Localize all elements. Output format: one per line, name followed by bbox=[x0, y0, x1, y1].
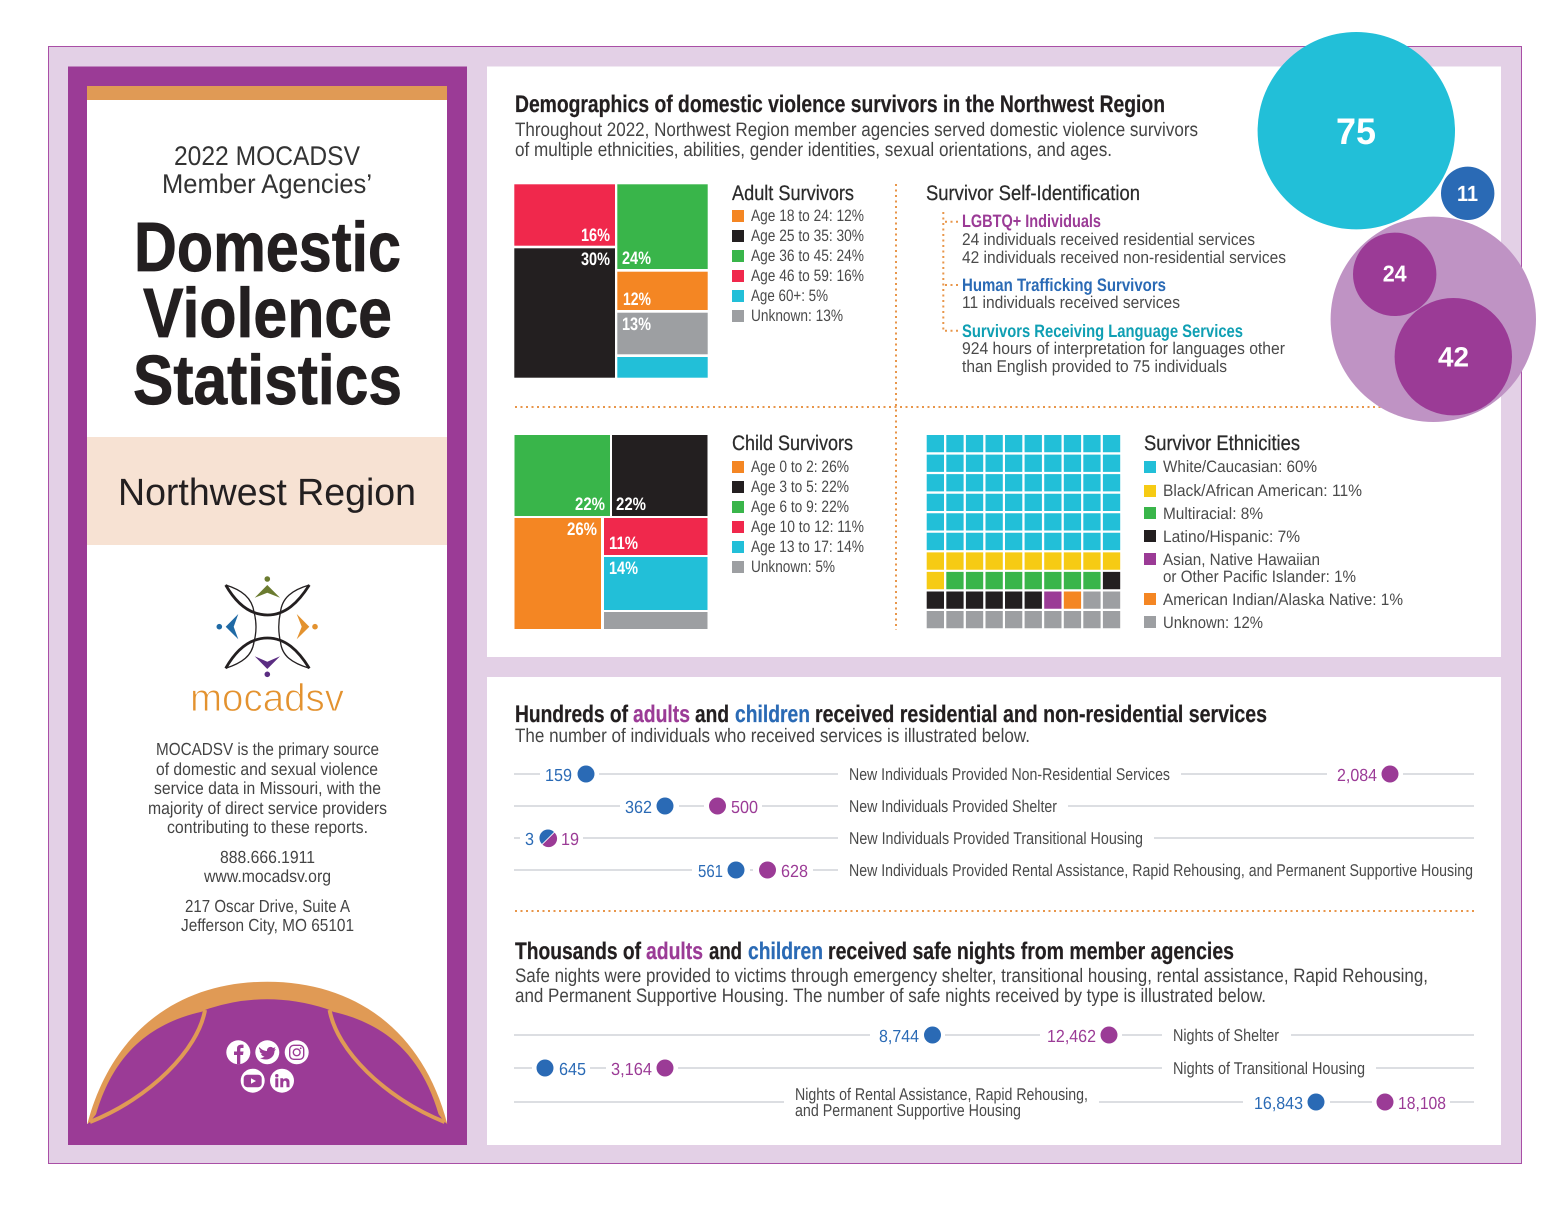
panel: demographics bbox=[487, 66, 1501, 657]
chart: child survivors treemap: 22% bbox=[575, 494, 605, 514]
LGBTQ+ individuals: LGBTQ+ Individuals bbox=[962, 211, 1101, 231]
legend: survivor ethnicities: Asian, Native Hawaiian bbox=[1163, 551, 1320, 569]
dot plot: shelter: 362 bbox=[625, 797, 652, 817]
dot plot: non-residential services: 2,084 bbox=[1337, 765, 1377, 785]
dot plot: non-residential services: New Individuals Provided Non-Residential Services bbox=[849, 765, 1170, 784]
survivors receiving language services: than English provided to 75 individuals bbox=[962, 357, 1227, 376]
dot plot: nights of rental assistance bbox=[514, 1085, 1474, 1120]
dot plot: nights of shelter: 12,462 bbox=[1047, 1026, 1096, 1046]
human trafficking survivors: 11 individuals received services bbox=[962, 293, 1180, 312]
services heading: adults bbox=[633, 701, 690, 728]
safe nights subheading: and Permanent Supportive Housing. The number of safe nights received by type is illustrated below. bbox=[515, 985, 1266, 1007]
decorative dome bbox=[87, 982, 447, 1124]
services subheading: The number of individuals who received services is illustrated below. bbox=[515, 725, 1030, 747]
dot plot: rental assistance: 561 bbox=[698, 861, 723, 881]
dot plot: nights of transitional housing: 3,164 bbox=[611, 1059, 652, 1079]
legend: survivor ethnicities: American Indian/Alaska Native: 1% bbox=[1163, 591, 1403, 609]
dot plot: non-residential services: 159 bbox=[545, 765, 572, 785]
legend: adult survivors bbox=[732, 182, 864, 325]
icon: facebook bbox=[226, 1040, 250, 1064]
safe nights heading: adults bbox=[646, 938, 703, 965]
human trafficking survivors: Human Trafficking Survivors bbox=[962, 275, 1166, 295]
logo wordmark: mocadsv bbox=[190, 677, 344, 720]
demographics intro bbox=[515, 119, 1198, 161]
contact details: www.mocadsv.org bbox=[203, 866, 331, 886]
dot plot: nights of rental assistance: 18,108 bbox=[1398, 1093, 1446, 1113]
about text: MOCADSV is the primary source bbox=[156, 739, 379, 759]
safe nights subheading: Safe nights were provided to victims through emergency shelter, transitional housing, rental assistance, Rapid Rehousing, bbox=[515, 965, 1428, 987]
dot plot: non-residential services bbox=[514, 765, 1474, 785]
chart: ethnicity waffle bbox=[927, 435, 1120, 628]
bubble: 75: 75 bbox=[1336, 111, 1376, 152]
survivor self-identification: Survivor Self-Identification bbox=[926, 182, 1140, 205]
legend: adult survivors: Age 46 to 59: 16% bbox=[751, 267, 864, 285]
legend: child survivors: Age 6 to 9: 22% bbox=[751, 498, 849, 516]
legend: adult survivors: Age 25 to 35: 30% bbox=[751, 227, 864, 245]
legend: child survivors: Child Survivors bbox=[732, 432, 853, 455]
icon: instagram bbox=[285, 1040, 309, 1064]
legend: survivor ethnicities: Latino/Hispanic: 7% bbox=[1163, 528, 1300, 546]
chart: child survivors treemap: 14% bbox=[609, 558, 638, 578]
chart: adult survivors treemap: 13% bbox=[622, 314, 651, 334]
legend: adult survivors: Age 36 to 45: 24% bbox=[751, 247, 864, 265]
bubble: 11 bbox=[1441, 167, 1494, 220]
dot plot: nights of shelter: Nights of Shelter bbox=[1173, 1026, 1279, 1045]
LGBTQ+ individuals: 42 individuals received non-residential services bbox=[962, 248, 1286, 267]
survivor self-identification bbox=[926, 182, 1286, 376]
dot plot: transitional housing: 3 bbox=[525, 829, 534, 849]
safe nights heading: children bbox=[748, 938, 823, 965]
sidebar kicker: 2022 MOCADSV bbox=[174, 141, 360, 171]
panel: services and safe nights bbox=[487, 677, 1501, 1145]
safe nights heading: and bbox=[709, 938, 742, 965]
chart: self-identification bubbles bbox=[1258, 32, 1536, 422]
legend: survivor ethnicities: Multiracial: 8% bbox=[1163, 505, 1263, 523]
about text: of domestic and sexual violence bbox=[156, 759, 378, 779]
bubble: 75 bbox=[1258, 32, 1455, 229]
title bbox=[133, 208, 402, 419]
services heading: Hundreds of bbox=[515, 701, 629, 728]
services heading: received residential and non-residential services bbox=[815, 701, 1267, 728]
bubble: 24: 24 bbox=[1383, 261, 1407, 287]
legend: survivor ethnicities bbox=[1144, 432, 1403, 632]
contact details: 888.666.1911 bbox=[220, 847, 315, 867]
bubble: 11: 11 bbox=[1457, 181, 1478, 206]
safe nights subheading bbox=[515, 965, 1428, 1007]
dot plot: nights of transitional housing: Nights of Transitional Housing bbox=[1173, 1059, 1365, 1078]
title: Domestic bbox=[134, 208, 401, 286]
legend: survivor ethnicities: Unknown: 12% bbox=[1163, 614, 1263, 632]
sidebar kicker bbox=[162, 141, 372, 199]
address: Jefferson City, MO 65101 bbox=[181, 915, 354, 935]
region banner bbox=[87, 437, 447, 545]
chart: adult survivors treemap: 30% bbox=[581, 249, 610, 269]
icon: youtube bbox=[241, 1069, 265, 1093]
address bbox=[181, 896, 354, 935]
services heading: children bbox=[735, 701, 810, 728]
dot plot: nights of rental assistance: 16,843 bbox=[1254, 1093, 1303, 1113]
about text: service data in Missouri, with the bbox=[154, 778, 381, 798]
dot plot: rental assistance bbox=[514, 861, 1473, 881]
safe nights heading: Thousands of bbox=[515, 938, 642, 965]
dot plot: transitional housing bbox=[514, 829, 1474, 849]
safe nights heading: received safe nights from member agencies bbox=[828, 938, 1234, 965]
chart: adult survivors treemap bbox=[514, 184, 708, 378]
legend: adult survivors: Adult Survivors bbox=[732, 182, 854, 205]
about text bbox=[148, 739, 387, 837]
about text: contributing to these reports. bbox=[167, 817, 368, 837]
dot plot: nights of shelter bbox=[514, 1026, 1474, 1046]
legend: survivor ethnicities: Survivor Ethnicities bbox=[1144, 432, 1300, 455]
region banner: Northwest Region bbox=[118, 472, 416, 514]
legend: survivor ethnicities: or Other Pacific Islander: 1% bbox=[1163, 568, 1356, 586]
legend: child survivors: Age 3 to 5: 22% bbox=[751, 478, 849, 496]
dot plot: shelter: New Individuals Provided Shelter bbox=[849, 797, 1057, 816]
demographics heading: Demographics of domestic violence survivors in the Northwest Region bbox=[515, 91, 1165, 118]
chart: child survivors treemap: 11% bbox=[609, 533, 638, 553]
title: Statistics bbox=[133, 341, 402, 419]
icon: linkedin bbox=[270, 1069, 294, 1093]
dot plot: nights of rental assistance: Nights of Rental Assistance, Rapid Rehousing, bbox=[795, 1085, 1088, 1104]
contact details bbox=[203, 847, 331, 886]
dot plot: nights of shelter: 8,744 bbox=[879, 1026, 919, 1046]
bubble: 24 bbox=[1353, 233, 1436, 316]
chart: adult survivors treemap: 24% bbox=[622, 248, 651, 268]
services heading bbox=[515, 701, 1267, 728]
dot plot: rental assistance: 628 bbox=[781, 861, 808, 881]
dot plot: nights of transitional housing: 645 bbox=[559, 1059, 586, 1079]
bubble: LGBTQ+ total bbox=[1331, 217, 1536, 422]
dot plot: shelter bbox=[514, 797, 1474, 817]
dot plot: transitional housing: 19 bbox=[561, 829, 579, 849]
legend: survivor ethnicities: White/Caucasian: 60% bbox=[1163, 458, 1317, 476]
icon: twitter bbox=[255, 1040, 279, 1064]
address: 217 Oscar Drive, Suite A bbox=[185, 896, 350, 916]
dot plot: nights of transitional housing bbox=[514, 1059, 1474, 1079]
legend: child survivors: Age 13 to 17: 14% bbox=[751, 538, 864, 556]
legend: adult survivors: Age 60+: 5% bbox=[751, 287, 828, 305]
demographics intro: of multiple ethnicities, abilities, gender identities, sexual orientations, and ages. bbox=[515, 139, 1112, 161]
safe nights heading bbox=[515, 938, 1234, 965]
sidebar top accent bbox=[87, 86, 447, 100]
bubble: 42: 42 bbox=[1438, 342, 1469, 373]
chart: adult survivors treemap: 16% bbox=[581, 225, 610, 245]
LGBTQ+ individuals: 24 individuals received residential services bbox=[962, 230, 1255, 249]
chart: child survivors treemap bbox=[514, 435, 708, 629]
chart: child survivors treemap: 22% bbox=[616, 494, 646, 514]
survivors receiving language services: 924 hours of interpretation for languages other bbox=[962, 339, 1285, 358]
demographics intro: Throughout 2022, Northwest Region member agencies served domestic violence survivors bbox=[515, 119, 1198, 141]
legend: adult survivors: Unknown: 13% bbox=[751, 307, 843, 325]
dot plot: shelter: 500 bbox=[731, 797, 758, 817]
sidebar kicker: Member Agencies’ bbox=[162, 169, 372, 199]
icon: mocadsv logo bbox=[216, 576, 318, 677]
legend: child survivors: Age 0 to 2: 26% bbox=[751, 458, 849, 476]
dot plot: transitional housing: New Individuals Provided Transitional Housing bbox=[849, 829, 1143, 848]
chart: child survivors treemap: 26% bbox=[567, 519, 597, 539]
LGBTQ+ individuals bbox=[962, 211, 1286, 267]
legend: child survivors bbox=[732, 432, 864, 576]
survivors receiving language services: Survivors Receiving Language Services bbox=[962, 321, 1243, 341]
bubble: 42 bbox=[1395, 298, 1512, 415]
human trafficking survivors bbox=[962, 275, 1180, 312]
chart: adult survivors treemap: 12% bbox=[623, 289, 651, 309]
legend: child survivors: Unknown: 5% bbox=[751, 558, 835, 576]
survivors receiving language services bbox=[962, 321, 1285, 376]
title: Violence bbox=[143, 274, 392, 352]
legend: survivor ethnicities: Black/African American: 11% bbox=[1163, 482, 1362, 500]
services heading: and bbox=[695, 701, 729, 728]
legend: adult survivors: Age 18 to 24: 12% bbox=[751, 207, 864, 225]
panel: left sidebar bbox=[68, 66, 467, 1145]
legend: child survivors: Age 10 to 12: 11% bbox=[751, 518, 864, 536]
about text: majority of direct service providers bbox=[148, 798, 387, 818]
dot plot: nights of rental assistance: and Permanent Supportive Housing bbox=[795, 1101, 1021, 1120]
